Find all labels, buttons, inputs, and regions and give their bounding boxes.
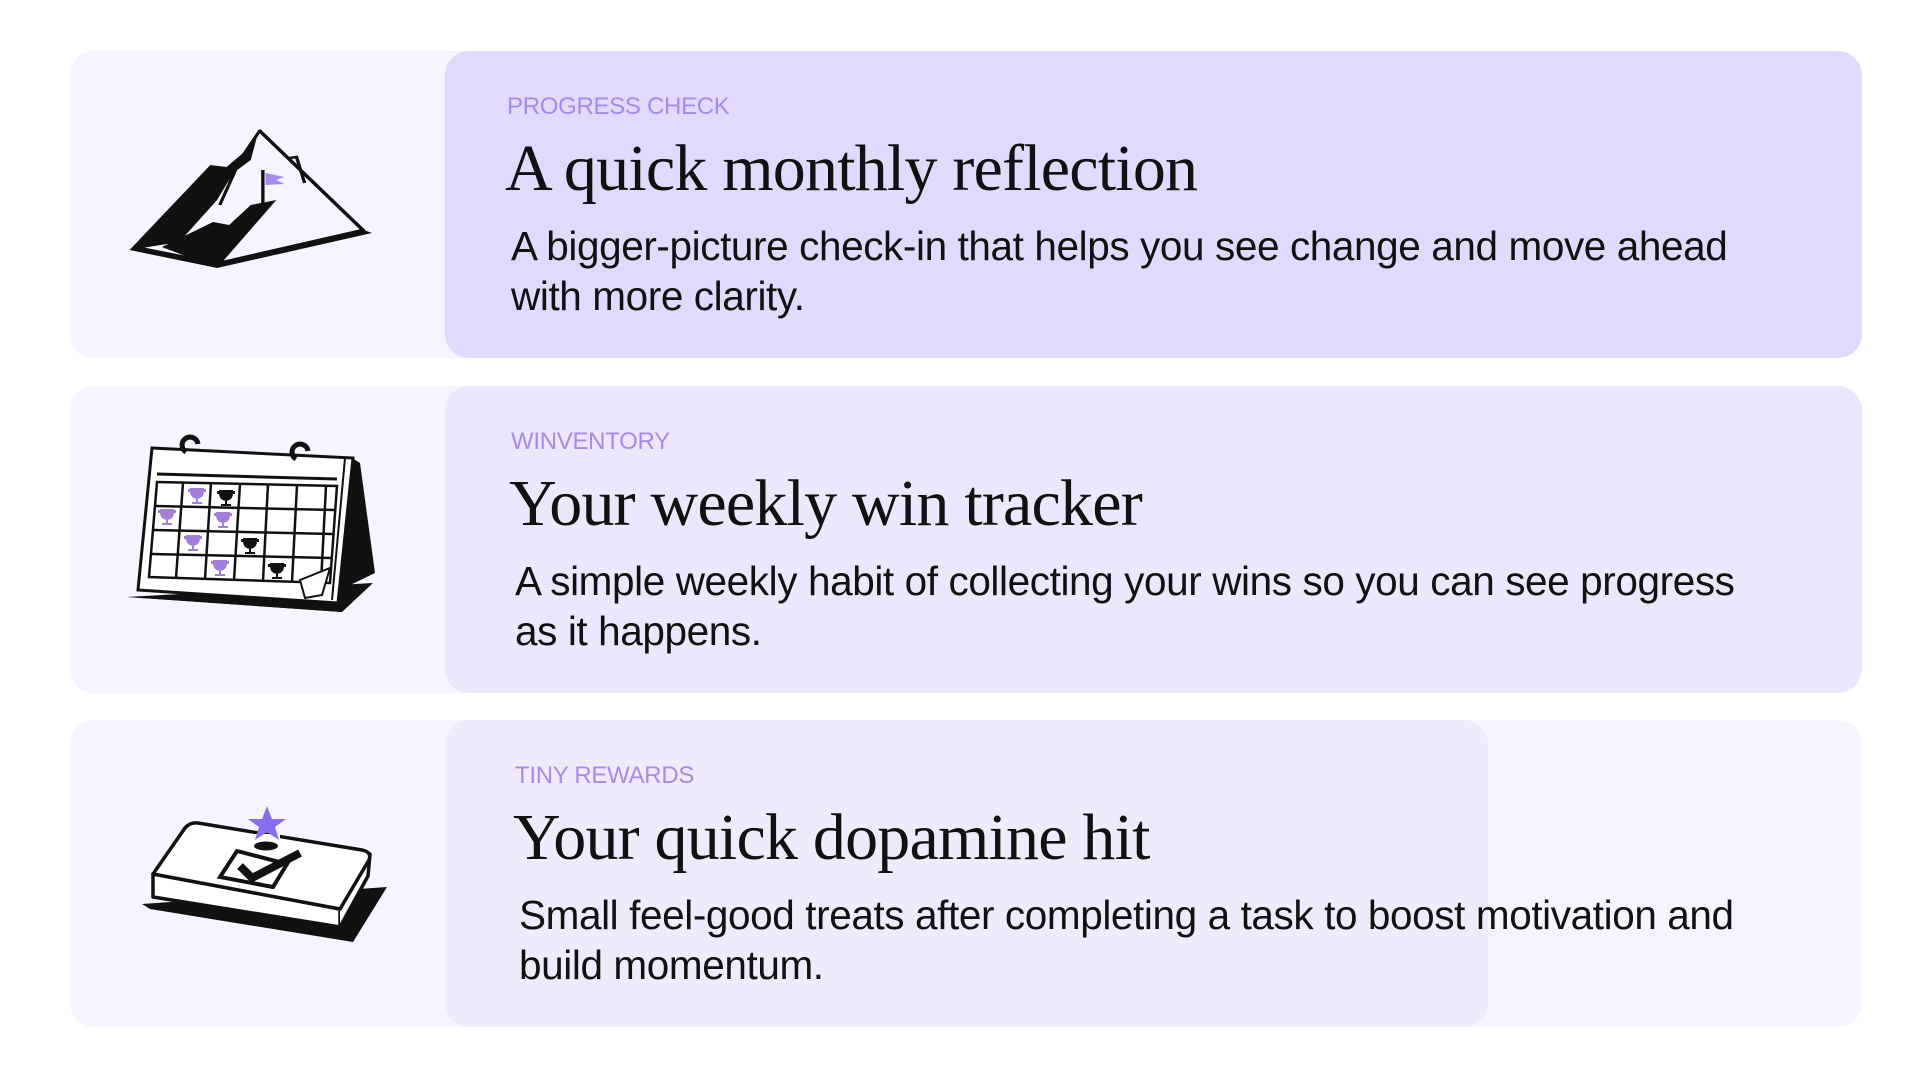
panel: text: [445, 51, 1862, 358]
title: Your weekly win tracker: [509, 467, 1142, 540]
label: TINY REWARDS: [515, 762, 694, 789]
label: PROGRESS CHECK: [507, 93, 730, 120]
panel: winventory: [70, 386, 1862, 693]
body: Small feel-good treats after completing a task to boost motivation and build momentum.: [519, 892, 1734, 988]
title: A quick monthly reflection: [505, 132, 1197, 205]
panel: text: [445, 386, 1862, 693]
title: Your quick dopamine hit: [513, 801, 1150, 874]
icon: button with star: [142, 806, 387, 942]
body: A bigger-picture check-in that helps you see change and move ahead with more clarity.: [511, 223, 1727, 319]
panel: text: [445, 720, 1488, 1027]
panel: tiny rewards: [70, 720, 1862, 1027]
body: A simple weekly habit of collecting your wins so you can see progress as it happens.: [515, 558, 1735, 654]
icon: mountain: [130, 129, 372, 268]
panel: progress check: [70, 51, 1862, 358]
icon: calendar: [127, 434, 375, 612]
label: WINVENTORY: [511, 428, 670, 455]
